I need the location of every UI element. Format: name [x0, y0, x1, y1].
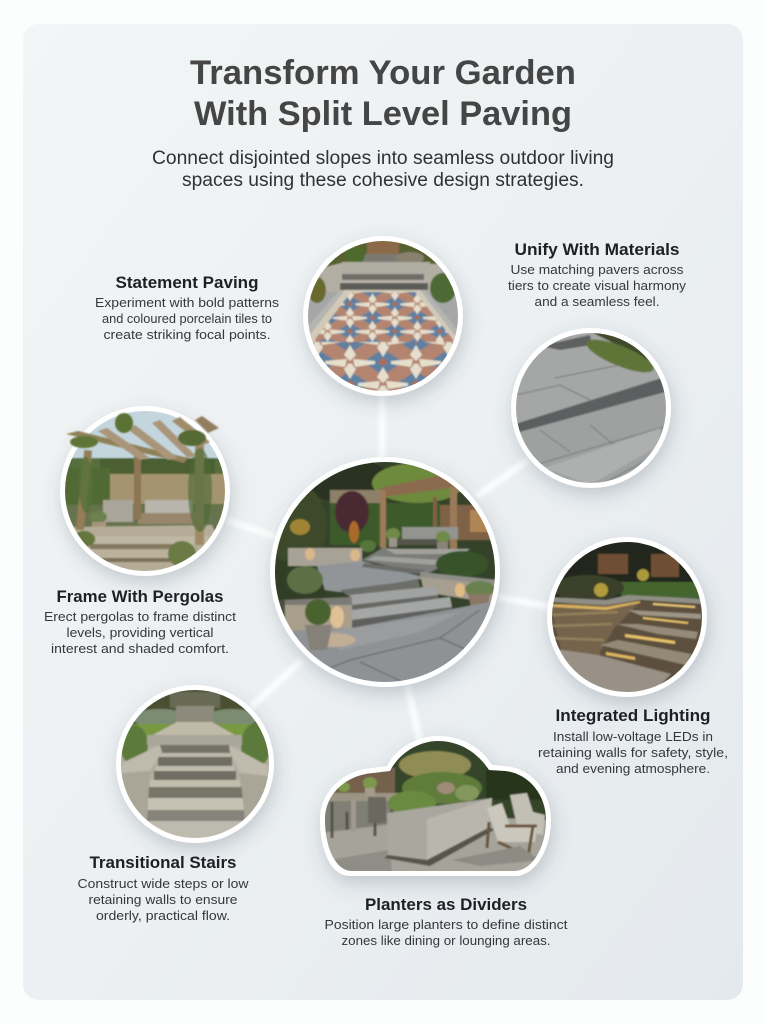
text block: integrated lighting: Install low-voltage LEDs in — [553, 729, 713, 744]
text block: statement paving: Statement Paving — [116, 273, 258, 292]
text block: transitional stairs — [78, 853, 249, 923]
photo: integrated lighting — [547, 537, 708, 697]
text block: frame with pergolas — [44, 587, 236, 656]
text block: unify with materials: and a seamless feel. — [534, 294, 660, 309]
connector rays — [226, 393, 552, 742]
text block: transitional stairs: retaining walls to ensure — [88, 892, 238, 907]
text block: transitional stairs: Construct wide steps or low — [78, 876, 249, 891]
text block: planters as dividers — [324, 895, 568, 948]
text block: planters as dividers: Position large planters to define distinct — [324, 917, 568, 932]
text block: frame with pergolas: levels, providing vertical — [66, 625, 214, 640]
text block: statement paving: create striking focal points. — [104, 327, 270, 342]
text block: frame with pergolas: Erect pergolas to frame distinct — [44, 609, 236, 624]
photo: transitional stairs — [116, 685, 276, 845]
text block: unify with materials: Use matching pavers across — [510, 262, 684, 277]
photo: pergola garden — [60, 406, 230, 576]
text block: transitional stairs: Transitional Stairs — [90, 853, 236, 872]
title: With Split Level Paving — [194, 95, 572, 133]
text block: unify with materials: tiers to create visual harmony — [508, 278, 687, 293]
text block: statement paving: Experiment with bold patterns — [95, 295, 280, 310]
text block: frame with pergolas: Frame With Pergolas — [56, 587, 224, 606]
text block: frame with pergolas: interest and shaded comfort. — [51, 641, 229, 656]
text block: transitional stairs: orderly, practical flow. — [96, 908, 230, 923]
photo: unify with materials — [511, 328, 672, 489]
text block: unify with materials — [508, 240, 687, 309]
text block: statement paving: and coloured porcelain tiles to — [102, 311, 272, 326]
text block: integrated lighting: and evening atmosphere. — [556, 761, 710, 776]
photo: planters as dividers (cloud) — [320, 736, 552, 880]
title: Transform Your Garden — [190, 54, 576, 92]
text block: unify with materials: Unify With Materials — [514, 240, 680, 259]
icon: pergola beams overflow — [66, 413, 219, 463]
text block: integrated lighting: retaining walls for safety, style, — [538, 745, 728, 760]
photo: statement paving — [300, 236, 470, 400]
text block: planters as dividers: zones like dining or lounging areas. — [342, 933, 550, 948]
title — [190, 54, 576, 133]
photo: central split level garden — [267, 457, 500, 690]
subtitle: spaces using these cohesive design strategies. — [182, 170, 584, 191]
subtitle — [152, 148, 614, 191]
text block: integrated lighting: Integrated Lighting — [556, 706, 710, 725]
text block: statement paving — [95, 273, 280, 342]
subtitle: Connect disjointed slopes into seamless outdoor living — [152, 148, 614, 169]
text block: planters as dividers: Planters as Dividers — [365, 895, 527, 914]
text block: integrated lighting — [538, 706, 728, 776]
